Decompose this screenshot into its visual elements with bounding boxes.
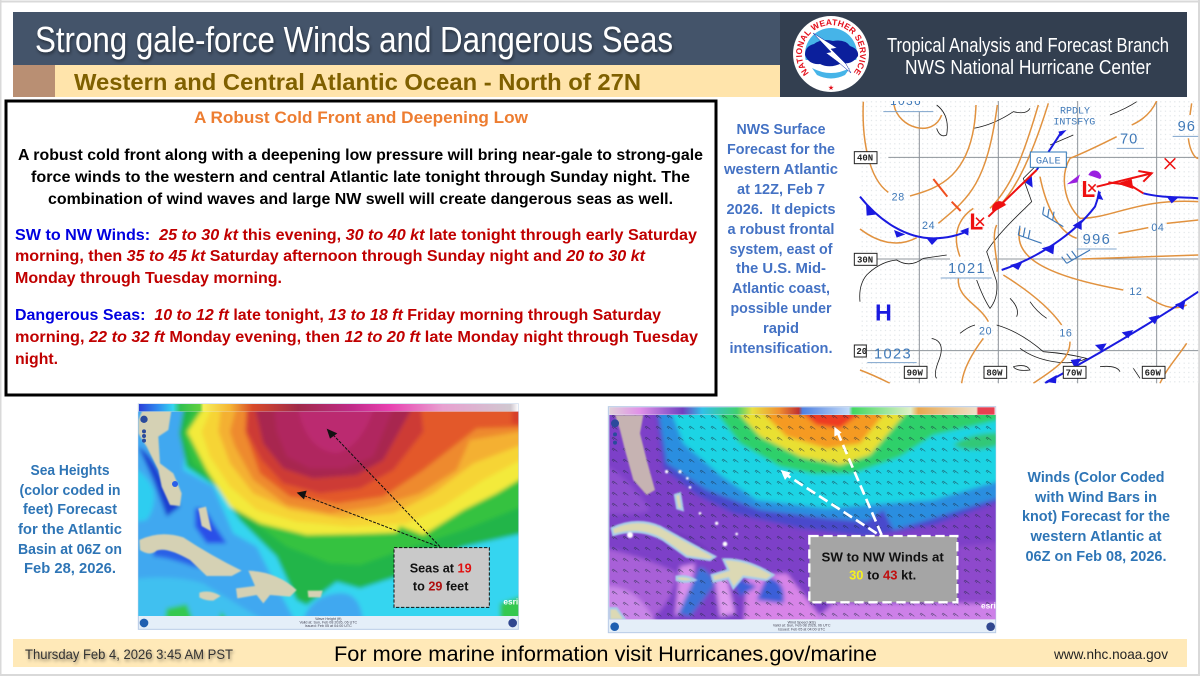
pressure labels [867, 94, 1198, 363]
subtitle: Western and Central Atlantic Ocean - North of 27N [74, 69, 641, 95]
pressure centers [875, 158, 1175, 325]
pressure labels: 1021 [948, 261, 986, 277]
pressure labels: 20 [979, 325, 992, 337]
surface forecast caption: a robust frontal [728, 221, 834, 238]
surface forecast caption: Forecast for the [727, 141, 835, 158]
surface forecast caption: 2026. It depicts [726, 201, 836, 218]
branding panel [780, 12, 1187, 97]
summary paragraph: combination of wind waves and large NW swell will create dangerous seas as well. [48, 191, 673, 208]
title: Strong gale-force Winds and Dangerous Seas [35, 19, 673, 60]
website: www.nhc.noaa.gov [1053, 646, 1168, 662]
longitude labels: 80W [986, 369, 1003, 379]
center name: NWS National Hurricane Center [905, 57, 1151, 79]
icon: NWS logo: NATIONAL WEATHER SERVICE [796, 19, 866, 76]
callout: seas: Seas at 19 [410, 562, 472, 576]
pressure centers: L [1081, 176, 1095, 202]
longitude labels: 60W [1145, 369, 1161, 379]
pressure centers: H [875, 299, 892, 325]
zoom controls [611, 419, 619, 445]
arrows to peak seas [297, 429, 440, 547]
winds map: esri [981, 600, 996, 610]
footer band [13, 639, 1187, 667]
pressure labels: 70 [1120, 131, 1138, 147]
surface forecast caption: the U.S. Mid- [736, 260, 826, 277]
pressure centers: L [969, 209, 983, 235]
callout: winds: 30 to 43 kt. [849, 567, 916, 582]
arrows to peak winds [781, 427, 882, 535]
surface forecast caption: at 12Z, Feb 7 [737, 181, 825, 198]
latitude labels [854, 152, 877, 357]
longitude labels [904, 366, 1165, 379]
pressure labels: 96 [1178, 119, 1196, 135]
surface forecast caption: Atlantic coast, [732, 280, 830, 297]
summary paragraph: A robust cold front along with a deepening low pressure will bring near-gale to strong-gale [18, 147, 703, 164]
winds map [608, 406, 996, 634]
color scale bar [609, 407, 996, 415]
surface forecast map [854, 94, 1198, 383]
map legend footer: Issued: Feb 05 at 04:00 UTC [305, 624, 352, 628]
wind barbs [1018, 207, 1090, 263]
gale warning tag: GALE [1036, 156, 1061, 168]
sea heights caption: Feb 28, 2026. [24, 560, 116, 577]
pressure labels: 16 [1059, 328, 1073, 340]
callout: seas: to 29 feet [413, 579, 469, 593]
winds caption: western Atlantic at [1030, 528, 1162, 545]
summary paragraph: force winds to the western and central Atlantic late tonight through Sunday night. The [31, 169, 690, 186]
longitude labels: 70W [1066, 369, 1082, 379]
surface forecast caption: rapid [763, 320, 799, 337]
longitude labels: 90W [907, 369, 923, 379]
sea heights caption [18, 462, 122, 577]
weather fronts [860, 130, 1198, 383]
map legend footer: Wave Height (ft) [315, 617, 341, 621]
map legend footer [140, 617, 517, 628]
sea heights caption: (color coded in [20, 482, 120, 499]
pressure labels: 04 [1151, 222, 1165, 234]
sea heights caption: feet) Forecast [23, 501, 117, 518]
pressure labels: INTSFYG [1053, 116, 1095, 127]
map legend footer: Issued: Feb 05 at 04:00 UTC [778, 627, 825, 631]
winds caption: with Wind Bars in [1034, 489, 1157, 506]
seas forecast: night. [15, 351, 58, 368]
surface forecast caption: system, east of [730, 241, 833, 258]
pressure labels: 12 [1129, 286, 1143, 298]
sea heights map [138, 404, 519, 630]
summary paragraph [18, 147, 703, 208]
map legend footer: Valid at: Sun, Feb 08 2026, 06 UTC [773, 624, 831, 628]
gale warning tag [1030, 152, 1066, 168]
seas forecast: morning, 22 to 32 ft Monday evening, then 12 to 20 ft late Monday night through Tuesday [15, 329, 698, 346]
panel: forecast summary [6, 101, 716, 395]
pressure labels: 28 [892, 191, 905, 203]
land masses [609, 493, 773, 620]
sea heights caption: Basin at 06Z on [18, 541, 122, 558]
surface forecast caption: possible under [730, 300, 832, 317]
seas forecast: Dangerous Seas: 10 to 12 ft late tonight, 13 to 18 ft Friday morning through Saturday [15, 307, 661, 324]
brown accent block [13, 65, 55, 97]
surface forecast caption: western Atlantic [723, 161, 838, 178]
winds caption: knot) Forecast for the [1022, 508, 1170, 525]
map legend footer: Wind Speed (kts) [788, 620, 816, 624]
map legend footer: Valid at: Sun, Feb 08 2026, 06 UTC [300, 620, 358, 624]
winds caption [1022, 469, 1170, 565]
color scale bar [139, 404, 518, 411]
pressure labels: 1023 [874, 346, 912, 362]
pressure labels: 24 [922, 220, 935, 232]
winds forecast: Monday through Tuesday morning. [15, 270, 282, 287]
pressure labels: 1036 [890, 94, 922, 108]
marine info link: For more marine information visit Hurricanes.gov/marine [334, 643, 877, 666]
winds forecast: SW to NW Winds: 25 to 30 kt this evening, 30 to 40 kt late tonight through early Saturday [15, 227, 697, 244]
winds caption: Winds (Color Coded [1028, 469, 1164, 486]
callout: winds: SW to NW Winds at [821, 551, 945, 565]
icon: NWS logo: ★ [828, 84, 834, 92]
sea heights caption: for the Atlantic [18, 521, 122, 538]
winds caption: 06Z on Feb 08, 2026. [1026, 548, 1166, 565]
zoom controls [140, 416, 148, 443]
seas forecast [15, 307, 698, 368]
winds forecast [15, 227, 697, 287]
sea heights caption: Sea Heights [30, 462, 110, 479]
land masses [138, 408, 323, 603]
surface forecast caption [723, 121, 838, 357]
callout: winds [809, 536, 957, 602]
surface forecast caption: intensification. [730, 340, 832, 357]
pressure labels: 996 [1083, 232, 1111, 248]
latitude labels: 40N [857, 154, 873, 164]
latitude labels: 30N [857, 255, 873, 265]
callout: seas [394, 548, 489, 607]
winds forecast: morning, then 35 to 45 kt Saturday afternoon through Sunday night and 20 to 30 kt [15, 248, 646, 265]
map legend footer [610, 620, 995, 631]
sea heights map: esri [503, 597, 518, 607]
pressure labels: RPDLY [1060, 106, 1090, 117]
subtitle band [55, 65, 780, 97]
date stamp: Thursday Feb 4, 2026 3:45 AM PST [25, 646, 233, 662]
summary heading: A Robust Cold Front and Deepening Low [194, 109, 528, 127]
header banner [13, 12, 780, 97]
surface forecast caption: NWS Surface [736, 121, 826, 138]
latitude labels: 20 [856, 347, 867, 357]
